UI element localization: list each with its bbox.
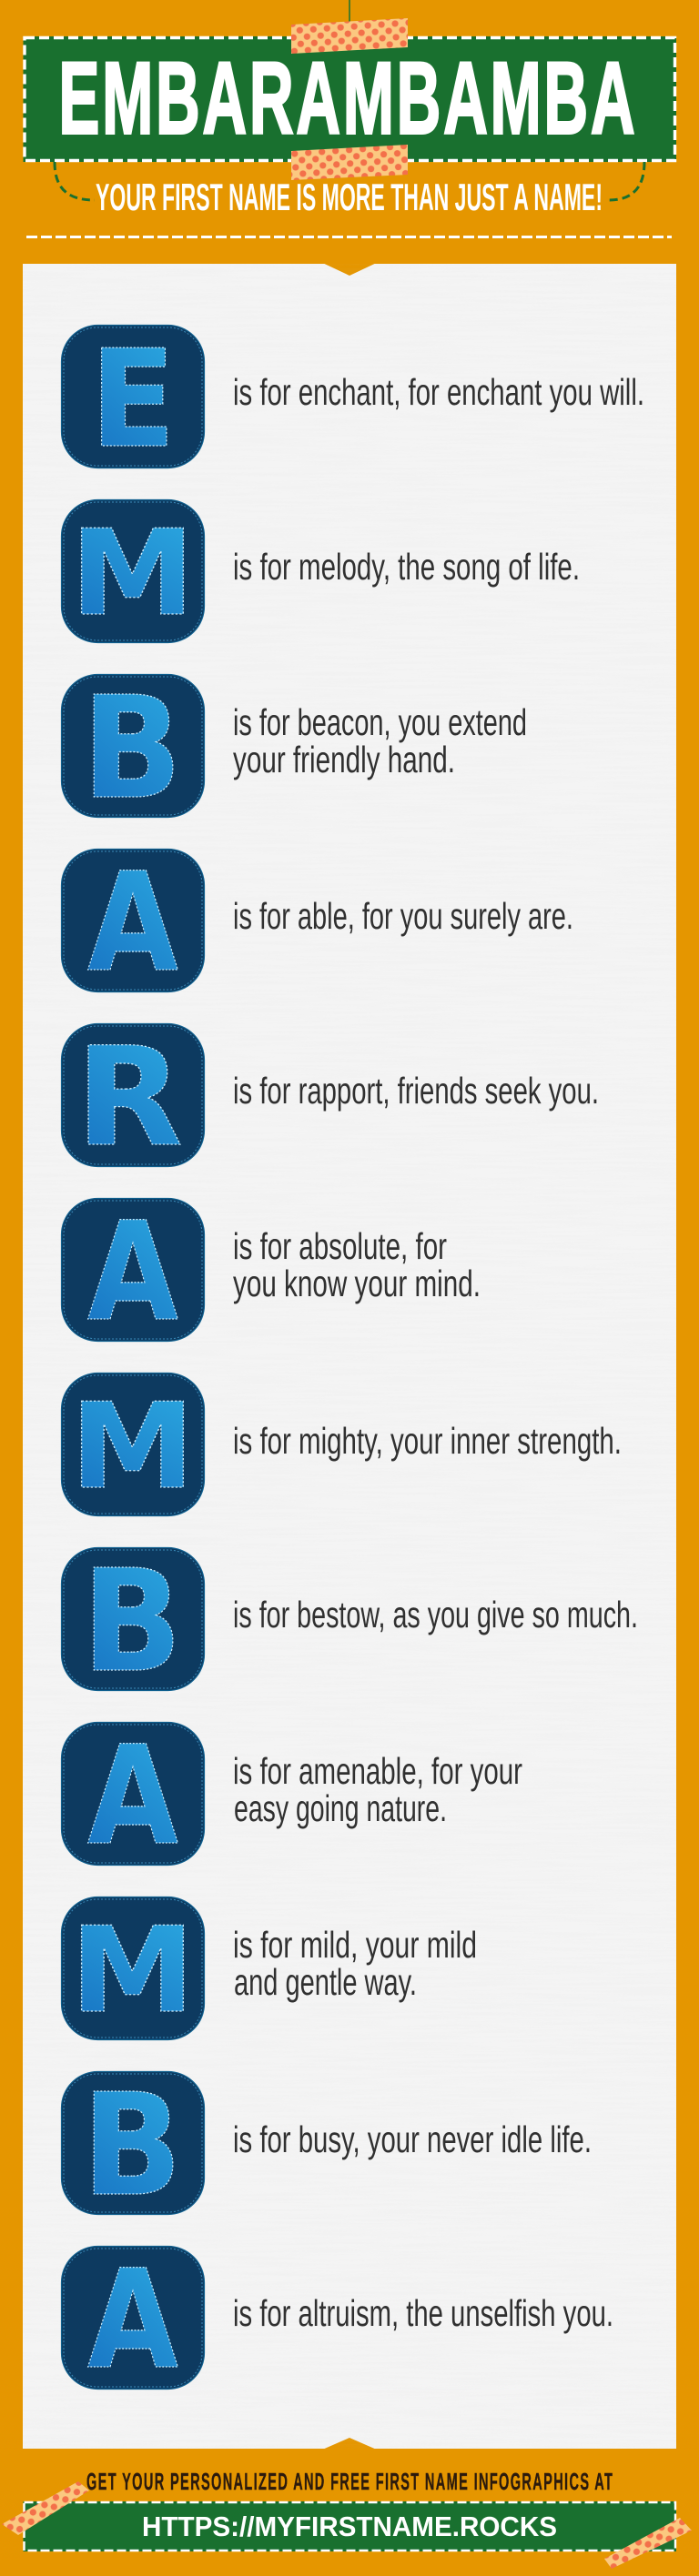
- row 9: A: [62, 1717, 522, 1876]
- icon: letter A: A: [87, 1193, 178, 1352]
- text: M: is for mild, your mild: [233, 1924, 477, 1966]
- text: A: is for absolute, for: [233, 1225, 447, 1267]
- icon: letter A: A: [87, 1717, 178, 1876]
- text: A line 2: easy going nature.: [234, 1787, 447, 1829]
- footer url: HTTPS://MYFIRSTNAME.ROCKS: [142, 2511, 557, 2542]
- divider: [26, 236, 672, 238]
- row 8: B: [62, 1539, 638, 1704]
- text: M line 2: and gentle way.: [234, 1961, 417, 2003]
- icon: letter A: A: [87, 844, 178, 1002]
- row 1: E: [62, 321, 644, 478]
- title: EMBARAMBAMBA: [58, 41, 635, 156]
- connector: right stitched curve: [609, 162, 644, 200]
- panel: letters background: [23, 264, 676, 2449]
- icon: letter E: E: [90, 321, 176, 478]
- icon: letter E: [62, 321, 204, 478]
- text: B line 2: your friendly hand.: [233, 739, 455, 780]
- icon: letter M: M: [70, 504, 195, 642]
- icon: letter M: M: [70, 1901, 195, 2039]
- icon: letter B: B: [82, 1539, 182, 1704]
- title banner: [24, 36, 676, 162]
- text: A: is for amenable, for your: [233, 1750, 522, 1792]
- tape: footer left: [2, 2481, 89, 2535]
- row 12: A: [62, 2241, 613, 2400]
- icon: letter B: B: [82, 666, 182, 830]
- icon: letter A: A: [87, 2241, 178, 2400]
- hanging line: [349, 0, 350, 24]
- row 10: M: [62, 1897, 477, 2039]
- row 2: M: [62, 500, 580, 642]
- row 6: A: [62, 1193, 481, 1352]
- row 5: R: [62, 1019, 599, 1177]
- tape: banner top: [291, 18, 408, 54]
- row 3: B: [62, 666, 527, 830]
- footer banner: [24, 2501, 676, 2551]
- row 4: A: [62, 844, 573, 1002]
- icon: letter M: M: [70, 1377, 195, 1515]
- text: B: is for beacon, you extend: [233, 701, 527, 743]
- icon: letter B: B: [82, 2063, 182, 2228]
- tape: banner bottom: [291, 145, 408, 180]
- icon: letter R: R: [76, 1019, 183, 1177]
- text: A line 2: you know your mind.: [233, 1263, 481, 1304]
- row 7: M: [62, 1374, 622, 1515]
- tape: footer right: [604, 2518, 692, 2569]
- row 11: B: [62, 2063, 592, 2228]
- footer caption: GET YOUR PERSONALIZED AND FREE FIRST NAME INFOGRAPHICS AT: [86, 2470, 613, 2495]
- connector: left stitched curve: [55, 162, 95, 200]
